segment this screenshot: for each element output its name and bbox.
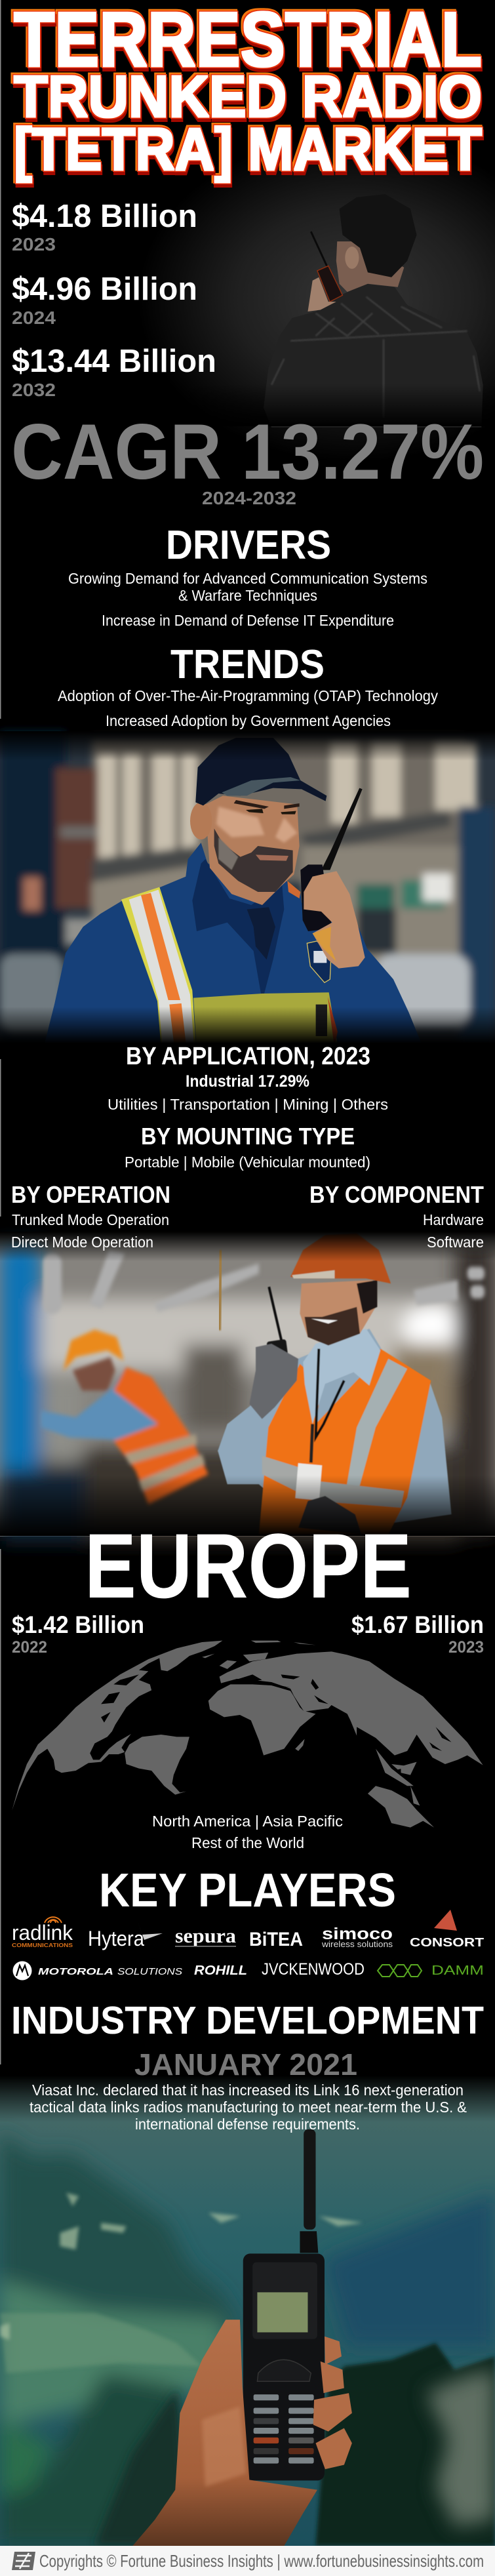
by operation section: Trunked Mode Operation — [12, 1211, 169, 1228]
logo: DAMM: DAMM — [431, 1963, 484, 1978]
title — [14, 0, 482, 183]
jacket — [44, 843, 423, 1056]
logo: DAMM — [378, 1963, 484, 1978]
stat: 2023 market size: 2023 — [12, 234, 56, 254]
heading: key players: KEY PLAYERS — [99, 1864, 396, 1917]
by mounting type section: BY MOUNTING TYPE — [141, 1123, 355, 1150]
by mounting type section — [125, 1123, 370, 1171]
title: TRUNKED RADIO — [14, 64, 482, 130]
main worker body — [218, 1329, 452, 1535]
by application section: BY APPLICATION, 2023 — [126, 1043, 370, 1070]
logo: Hytera — [88, 1922, 163, 1950]
by component section — [309, 1181, 484, 1251]
by component section: Software — [427, 1234, 484, 1251]
development description: international defense requirements. — [135, 2116, 360, 2133]
radio antenna — [300, 2129, 318, 2253]
by operation section: Direct Mode Operation — [11, 1234, 153, 1251]
stat: 2023 market size: $4.18 Billion — [12, 199, 197, 234]
radio and glove — [269, 1287, 283, 1346]
development description — [30, 2082, 467, 2133]
stat: Europe 2022: 2022 — [12, 1638, 47, 1657]
trends section: Adoption of Over-The-Air-Programming (OTAP) Technology — [58, 687, 438, 704]
stat: Europe 2023: $1.67 Billion — [351, 1611, 484, 1638]
by operation section — [11, 1181, 170, 1251]
stat: 2023 market size — [12, 199, 197, 254]
radio — [321, 788, 363, 870]
other regions list: Rest of the World — [191, 1834, 304, 1851]
by application section — [108, 1043, 388, 1113]
stat: 2024 market size — [12, 272, 197, 328]
by application section: Utilities | Transportation | Mining | Others — [108, 1096, 388, 1113]
background worker — [41, 1330, 208, 1504]
radio — [311, 231, 328, 269]
logo: sepura: sepura — [175, 1924, 237, 1947]
hand — [307, 277, 336, 312]
drivers section: Increase in Demand of Defense IT Expenditure — [102, 612, 394, 629]
icon: Fortune Business Insights logo — [12, 2552, 35, 2570]
trends section — [58, 642, 438, 729]
hand — [132, 2320, 352, 2546]
logo: Hytera: Hytera — [88, 1927, 144, 1950]
head — [336, 241, 404, 292]
stat: Europe 2023 — [351, 1611, 484, 1657]
other regions list: North America | Asia Pacific — [152, 1813, 343, 1830]
by operation section: BY OPERATION — [11, 1181, 170, 1208]
face — [300, 1280, 376, 1346]
development description: Viasat Inc. declared that it has increased its Link 16 next-generation — [32, 2082, 464, 2099]
by application section: Industrial 17.29% — [186, 1072, 309, 1091]
stat: 2032 market size — [12, 344, 216, 400]
hard hat — [290, 1234, 391, 1283]
drivers section: & Warfare Techniques — [178, 587, 317, 604]
logo: Consort — [410, 1910, 484, 1949]
panel: mountain photo with handheld radio — [0, 2076, 495, 2546]
stat: 2024 market size: 2024 — [12, 308, 56, 328]
by mounting type section: Portable | Mobile (Vehicular mounted) — [125, 1154, 370, 1171]
stat: 2032 market size: 2032 — [12, 380, 56, 400]
by component section: Hardware — [423, 1211, 484, 1228]
drivers section: DRIVERS — [166, 523, 331, 568]
hand — [304, 871, 365, 969]
logo: JVCKENWOOD: JVCKENWOOD — [262, 1960, 365, 1979]
logo: simoco — [321, 1925, 393, 1949]
logo: Rohill: ROHILL — [194, 1963, 247, 1978]
footer — [0, 2546, 495, 2576]
reflective vest — [121, 887, 197, 1056]
world map globe — [12, 1641, 483, 1828]
stat: Europe 2022 — [12, 1611, 144, 1657]
heading: January 2021: JANUARY 2021 — [134, 2047, 357, 2082]
logo: Motorola Solutions — [13, 1961, 182, 1981]
logo: Motorola Solutions: SOLUTIONS — [117, 1966, 182, 1977]
stat: 2024 market size: $4.96 Billion — [12, 272, 197, 307]
trends section: TRENDS — [170, 642, 325, 687]
heading: Europe: EUROPE — [85, 1514, 412, 1617]
stat: Europe 2023: 2023 — [448, 1638, 484, 1657]
panel: photo of industrial workers — [0, 1232, 495, 1541]
jacket — [264, 284, 483, 428]
radio body — [243, 2253, 325, 2480]
logo: radlink: radlink — [12, 1921, 73, 1944]
stat: Europe 2022: $1.42 Billion — [12, 1611, 144, 1638]
logo: simoco: wireless solutions — [321, 1939, 393, 1949]
drivers section — [68, 523, 427, 629]
face — [205, 795, 300, 905]
trends section: Increased Adoption by Government Agencies — [106, 712, 391, 729]
logo: Consort: CONSORT — [410, 1936, 484, 1949]
logo: BiTEA: BiTEA — [249, 1929, 303, 1950]
panel: hero photo of man with radio — [0, 134, 495, 462]
logo: Motorola Solutions: MOTOROLA — [38, 1966, 113, 1977]
other regions list — [152, 1813, 343, 1851]
logo: simoco: simoco — [322, 1925, 393, 1943]
drivers section: Growing Demand for Advanced Communication Systems — [68, 570, 427, 587]
cap — [195, 738, 327, 805]
panel: photo of security officer with radio — [0, 731, 495, 1069]
key player logos — [12, 1910, 484, 1981]
development description: tactical data links radios manufacturing to meet near-term the U.S. & — [30, 2099, 467, 2116]
logo: radlink: COMMUNICATIONS — [12, 1942, 73, 1948]
stat: CAGR: 2024-2032 — [202, 488, 296, 508]
stat: 2032 market size: $13.44 Billion — [12, 344, 216, 379]
